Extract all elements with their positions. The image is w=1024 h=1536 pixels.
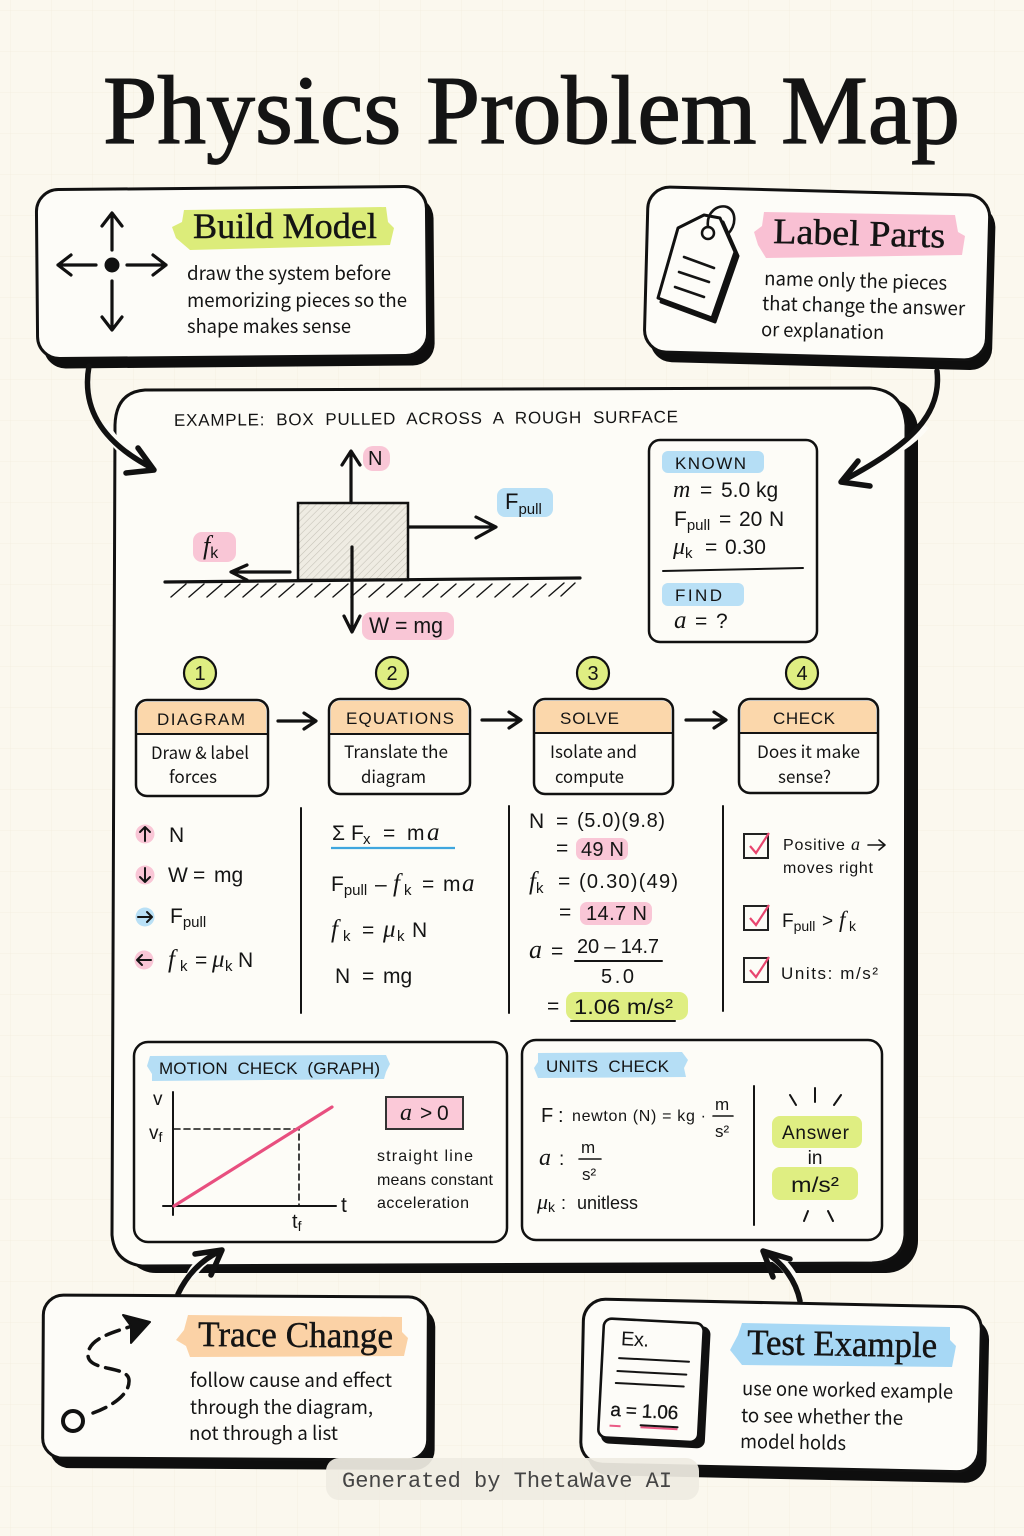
units equations: :	[558, 1105, 564, 1127]
equations list: pull	[344, 882, 367, 899]
step 4: check: 4	[796, 663, 808, 685]
units equations: m	[715, 1095, 729, 1114]
label fk	[193, 531, 236, 562]
step 2: equations: EQUATIONS	[346, 709, 454, 728]
units equations: newton (N) = kg ·	[572, 1108, 706, 1125]
solve working: =	[556, 810, 568, 833]
step 3: solve: SOLVE	[560, 709, 619, 728]
heading highlight and title: Build Model	[193, 206, 377, 246]
units equations	[536, 1095, 733, 1215]
find heading: FIND	[675, 586, 722, 605]
card: trace change	[43, 1295, 435, 1470]
step 1: diagram: 1	[194, 663, 206, 685]
label W = mg: W = mg	[369, 613, 443, 638]
description	[189, 1366, 392, 1446]
icon: tag	[658, 206, 738, 322]
icon: example note: a = 1.06	[610, 1400, 679, 1424]
sense checks: moves right	[783, 860, 874, 877]
arrow: step 3 to 4	[686, 712, 726, 728]
sense checks: k	[849, 918, 857, 934]
step 4: check: CHECK	[773, 709, 836, 728]
step 4: check: Does it make	[757, 738, 860, 763]
sense checks	[744, 833, 885, 983]
force list: F	[170, 905, 183, 928]
description: or explanation	[761, 315, 885, 345]
equations list: Σ	[332, 822, 345, 845]
label Fpull: F	[505, 489, 518, 514]
graph note: straight line	[377, 1148, 473, 1165]
sense checks: f	[839, 907, 849, 932]
known heading: KNOWN	[675, 454, 746, 473]
line graph: t	[341, 1194, 347, 1217]
units equations: s²	[582, 1165, 596, 1184]
units equations: :	[559, 1149, 564, 1170]
equations list: mg	[383, 965, 412, 988]
known values: pull	[687, 517, 710, 534]
description: draw the system before	[187, 259, 391, 286]
find value: =	[695, 610, 707, 633]
known values	[672, 477, 784, 562]
equations list: N	[412, 919, 427, 942]
solve working: =	[547, 995, 559, 1018]
card: label parts	[644, 187, 996, 371]
watermark: Generated by ThetaWave AI	[342, 1469, 672, 1494]
icon: right arrow	[136, 908, 154, 926]
sense checks: Positive a	[783, 834, 860, 854]
heading highlight and title: Test Example	[747, 1322, 938, 1365]
units equations: k	[548, 1199, 556, 1215]
title: Physics Problem Map	[103, 57, 960, 165]
units equations: unitless	[577, 1193, 638, 1213]
equations list: N	[335, 965, 350, 988]
checkbox 1	[744, 833, 769, 858]
answer badge: m/s²	[791, 1174, 839, 1197]
description: follow cause and effect	[190, 1366, 392, 1393]
line graph: f	[298, 1218, 302, 1234]
heading: UNITS CHECK	[546, 1057, 670, 1076]
sense checks: pull	[794, 918, 815, 934]
known values: =	[719, 508, 731, 531]
equations list: m	[407, 822, 424, 845]
line graph: f	[158, 1129, 162, 1145]
heading: MOTION CHECK (GRAPH)	[159, 1059, 380, 1078]
label fk: k	[210, 545, 219, 562]
icon: dashed path	[63, 1315, 150, 1431]
solve working: N	[529, 810, 544, 833]
arrow: step 1 to 2	[278, 713, 316, 729]
callout: a > 0: a	[400, 1100, 412, 1126]
arrow: trace change to motion check	[178, 1250, 222, 1294]
known values: 5.0	[721, 479, 750, 502]
step 2: equations	[329, 657, 470, 794]
equations list: =	[362, 919, 374, 942]
icon: up arrow	[136, 824, 154, 844]
equations list	[331, 819, 474, 988]
units equations: a	[539, 1145, 551, 1171]
step 2: equations: 2	[386, 663, 398, 685]
solve working: =	[556, 837, 568, 860]
equations list: k	[397, 928, 405, 945]
force list: k	[180, 958, 188, 975]
known values: N	[769, 508, 784, 531]
answer badge: Answer	[782, 1123, 850, 1144]
equations list: a	[427, 819, 440, 846]
step 3: solve: compute	[555, 763, 624, 788]
arrow: test example to units check	[763, 1251, 800, 1301]
label fk: f	[203, 531, 210, 560]
known values: =	[700, 479, 712, 502]
heading	[147, 1055, 390, 1081]
known values: kg	[756, 479, 778, 502]
equations list: x	[363, 831, 371, 848]
units equations: :	[561, 1193, 566, 1213]
equations list: f	[393, 870, 403, 897]
step 2: equations: Translate the	[344, 738, 448, 763]
equations list: a	[462, 870, 474, 897]
force list: pull	[183, 914, 206, 931]
equations list: F	[351, 822, 364, 845]
equations list: –	[375, 873, 387, 896]
solve working: f	[529, 868, 539, 895]
checkbox 3	[744, 957, 769, 982]
description: name only the pieces	[764, 264, 948, 296]
panel: motion check graph	[134, 1042, 507, 1242]
icon: force cross	[58, 213, 166, 330]
solve working: a	[529, 935, 542, 964]
units equations: s²	[715, 1122, 730, 1141]
units equations: m	[581, 1138, 595, 1157]
arrow: build model to diagram	[87, 366, 154, 473]
watermark	[326, 1458, 699, 1500]
description: through the diagram,	[190, 1393, 373, 1420]
line graph: v	[149, 1123, 158, 1144]
known values: =	[705, 536, 717, 559]
solve working: =	[559, 901, 571, 924]
solve working: 5.0	[601, 966, 634, 988]
step 4: check: sense?	[778, 763, 831, 788]
solve working: (0.30)(49)	[579, 871, 678, 893]
step 3: solve	[534, 657, 673, 794]
icon: example note: Ex.	[621, 1328, 650, 1352]
force list: N	[169, 824, 184, 847]
sense checks: >	[822, 911, 833, 932]
graph note: means constant	[377, 1172, 494, 1189]
solve working: k	[536, 880, 544, 897]
solve working: 14.7 N	[586, 903, 647, 925]
panel: units check	[522, 1040, 882, 1240]
force list	[134, 824, 253, 975]
box	[298, 503, 408, 580]
known and find box	[649, 440, 817, 642]
known values: 20	[739, 508, 762, 531]
equations list: =	[383, 822, 395, 845]
callout: a > 0	[386, 1097, 463, 1129]
solve working: 1.06 m/s²	[574, 996, 673, 1019]
card: build model	[36, 186, 435, 369]
solve working: =	[551, 940, 563, 963]
callout: a > 0: >	[420, 1102, 432, 1125]
arrow: label parts to known box	[841, 371, 938, 486]
label N: N	[368, 448, 382, 470]
known values: F	[674, 508, 687, 531]
equations list: μ	[382, 916, 396, 943]
description: model holds	[740, 1427, 846, 1456]
sense checks: F	[782, 911, 794, 932]
solve working: 20 – 14.7	[577, 936, 659, 958]
description: memorizing pieces so the	[187, 286, 407, 313]
line graph	[149, 1089, 347, 1234]
answer badge: in	[808, 1148, 822, 1169]
find value: a	[674, 607, 686, 634]
solve working: =	[558, 870, 570, 893]
known values: k	[685, 545, 693, 562]
force list: μ	[211, 946, 225, 973]
known values: μ	[672, 534, 685, 560]
description	[761, 264, 966, 345]
known heading	[662, 451, 764, 473]
step 1: diagram: Draw & label	[151, 739, 249, 764]
description: use one worked example	[742, 1374, 953, 1405]
equations list: k	[404, 882, 412, 899]
free body diagram	[165, 446, 580, 640]
units equations: μ	[537, 1189, 548, 1214]
step 1: diagram	[136, 657, 268, 796]
equations list: k	[343, 928, 351, 945]
description	[187, 259, 407, 339]
step 1: diagram: DIAGRAM	[157, 710, 245, 729]
description: shape makes sense	[187, 312, 351, 339]
label N	[363, 446, 390, 471]
label Fpull: pull	[518, 501, 542, 518]
equations list: =	[362, 965, 374, 988]
equations list: =	[422, 873, 434, 896]
callout: a > 0: 0	[437, 1102, 449, 1125]
icon: left arrow	[134, 950, 154, 970]
solve working	[529, 810, 688, 1021]
line graph: t	[292, 1211, 298, 1233]
solve working: 49 N	[581, 839, 624, 861]
known values: 0.30	[725, 536, 766, 559]
step 3: solve: 3	[587, 663, 599, 685]
equations list: f	[331, 916, 341, 943]
equations list: F	[331, 873, 344, 896]
force list: N	[238, 949, 253, 972]
description: not through a list	[189, 1419, 338, 1446]
heading highlight and title: Label Parts	[773, 211, 946, 255]
card: test example	[580, 1299, 990, 1483]
known values: m	[673, 477, 690, 503]
force list: W	[168, 864, 188, 887]
step 1: diagram: forces	[169, 763, 217, 788]
checkbox 2	[744, 905, 769, 930]
units equations: F	[541, 1105, 553, 1127]
graph note: acceleration	[377, 1195, 469, 1212]
force list: =	[193, 864, 205, 887]
arrow: step 2 to 3	[482, 712, 521, 728]
description: to see whether the	[741, 1401, 903, 1431]
step 2: equations: diagram	[361, 763, 426, 788]
find value: ?	[716, 610, 728, 633]
line graph: v	[153, 1089, 163, 1110]
example heading: EXAMPLE: BOX PULLED ACROSS A ROUGH SURFACE	[174, 407, 678, 430]
force list: f	[168, 946, 178, 973]
heading highlight and title: Trace Change	[198, 1314, 393, 1356]
equations list: m	[443, 873, 460, 896]
ground	[165, 578, 580, 582]
description: that change the answer	[762, 289, 966, 321]
force list: =	[195, 949, 207, 972]
answer badge	[772, 1088, 862, 1221]
graph note	[377, 1148, 494, 1212]
label Fpull	[497, 488, 553, 518]
description	[740, 1374, 953, 1456]
force arrows	[342, 451, 360, 502]
heading	[534, 1052, 688, 1078]
step 3: solve: Isolate and	[550, 738, 637, 763]
step 4: check	[739, 657, 878, 793]
force list: mg	[214, 864, 243, 887]
icon: example note	[598, 1318, 711, 1449]
find heading	[662, 583, 744, 606]
solve working: (5.0)(9.8)	[577, 810, 665, 832]
force list: k	[225, 958, 233, 975]
sense checks: Units: m/s²	[781, 964, 878, 983]
icon: down arrow	[136, 866, 154, 884]
